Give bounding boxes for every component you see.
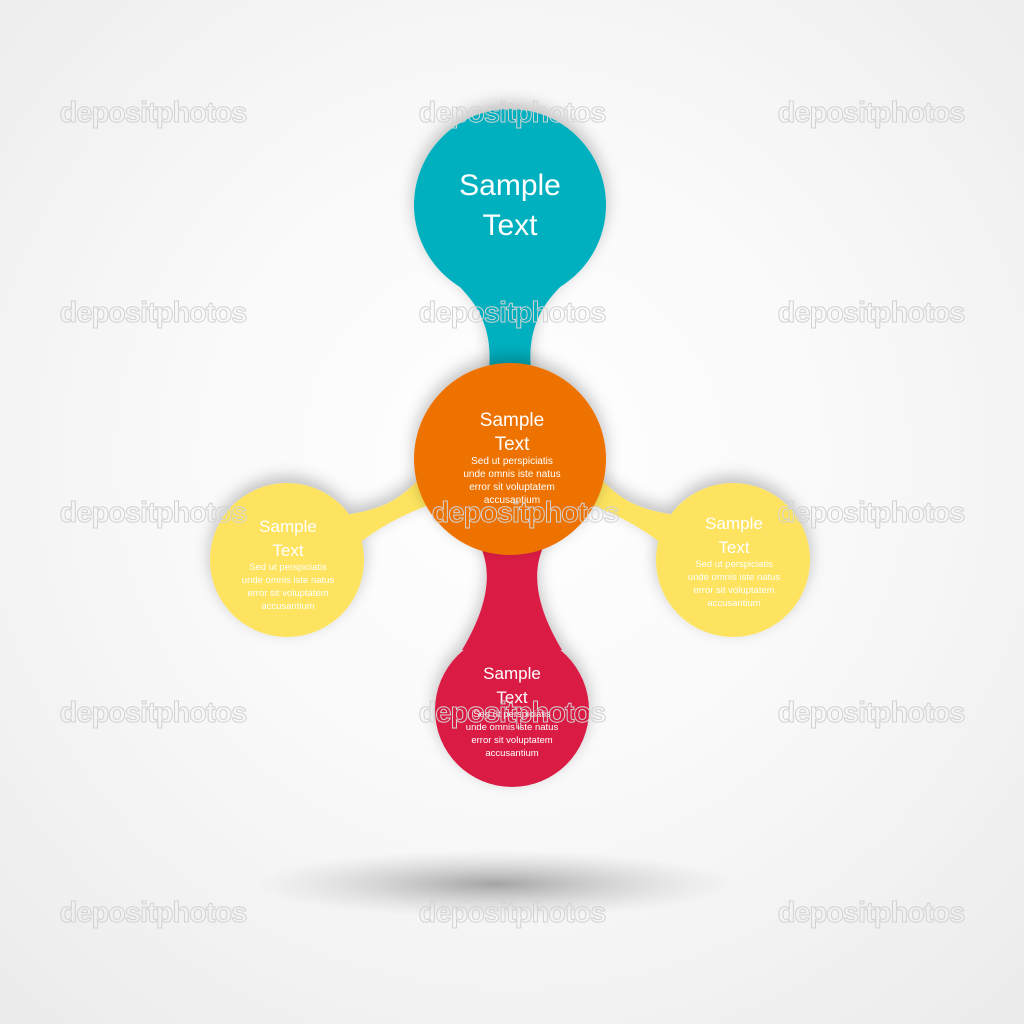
watermarks: depositphotos bbox=[778, 497, 964, 529]
watermarks: depositphotos bbox=[419, 897, 605, 929]
text: right yellow: accusantium bbox=[707, 598, 761, 609]
text: orange: error sit voluptatem bbox=[469, 482, 555, 493]
node: orange center bbox=[414, 363, 606, 555]
watermarks: depositphotos bbox=[419, 697, 605, 729]
text: left yellow: Sed ut perspiciatis bbox=[249, 562, 327, 573]
text: teal: Text bbox=[482, 209, 538, 242]
floor shadow bbox=[255, 850, 735, 918]
node: left yellow bbox=[210, 478, 428, 637]
text: right yellow: Sample bbox=[705, 514, 763, 533]
text: right yellow: unde omnis iste natus bbox=[688, 572, 780, 583]
watermarks: depositphotos bbox=[778, 697, 964, 729]
text: orange: Sed ut perspiciatis bbox=[471, 456, 553, 467]
text: left yellow: Sample bbox=[259, 517, 317, 536]
watermarks: depositphotos bbox=[778, 97, 964, 129]
text: red: Text bbox=[496, 688, 528, 707]
watermarks: depositphotos bbox=[432, 497, 618, 529]
node: teal top bbox=[414, 109, 606, 380]
text: red: accusantium bbox=[485, 748, 539, 759]
text: left yellow: Text bbox=[272, 541, 304, 560]
watermarks: depositphotos bbox=[60, 497, 246, 529]
node: red bottom bbox=[435, 530, 589, 787]
text: orange: unde omnis iste natus bbox=[463, 469, 561, 480]
text: right yellow bbox=[688, 514, 780, 609]
watermarks: depositphotos bbox=[419, 97, 605, 129]
node: right yellow bbox=[592, 478, 810, 637]
text: teal bbox=[459, 169, 561, 242]
watermarks: depositphotos bbox=[60, 97, 246, 129]
text: red: Sed ut perspiciatis bbox=[473, 709, 551, 720]
text: right yellow: error sit voluptatem bbox=[693, 585, 775, 596]
watermarks: depositphotos bbox=[778, 897, 964, 929]
watermarks: depositphotos bbox=[60, 297, 246, 329]
watermarks: depositphotos bbox=[778, 297, 964, 329]
text: teal: Sample bbox=[459, 169, 561, 202]
text: left yellow: unde omnis iste natus bbox=[242, 575, 334, 586]
text: red: unde omnis iste natus bbox=[466, 722, 558, 733]
text: left yellow bbox=[242, 517, 334, 612]
text: right yellow: Sed ut perspiciatis bbox=[695, 559, 773, 570]
text: orange: Text bbox=[495, 434, 530, 455]
text: left yellow: error sit voluptatem bbox=[247, 588, 329, 599]
text: right yellow: Text bbox=[718, 538, 750, 557]
text: red bbox=[466, 664, 558, 759]
watermarks: depositphotos bbox=[60, 897, 246, 929]
watermarks bbox=[60, 97, 964, 929]
text: red: error sit voluptatem bbox=[471, 735, 553, 746]
text: orange: accusantium bbox=[484, 495, 540, 506]
text: orange: Sample bbox=[480, 410, 544, 431]
text: red: Sample bbox=[483, 664, 541, 683]
text: orange bbox=[463, 410, 561, 506]
watermarks: depositphotos bbox=[60, 697, 246, 729]
text: left yellow: accusantium bbox=[261, 601, 315, 612]
watermarks: depositphotos bbox=[419, 297, 605, 329]
